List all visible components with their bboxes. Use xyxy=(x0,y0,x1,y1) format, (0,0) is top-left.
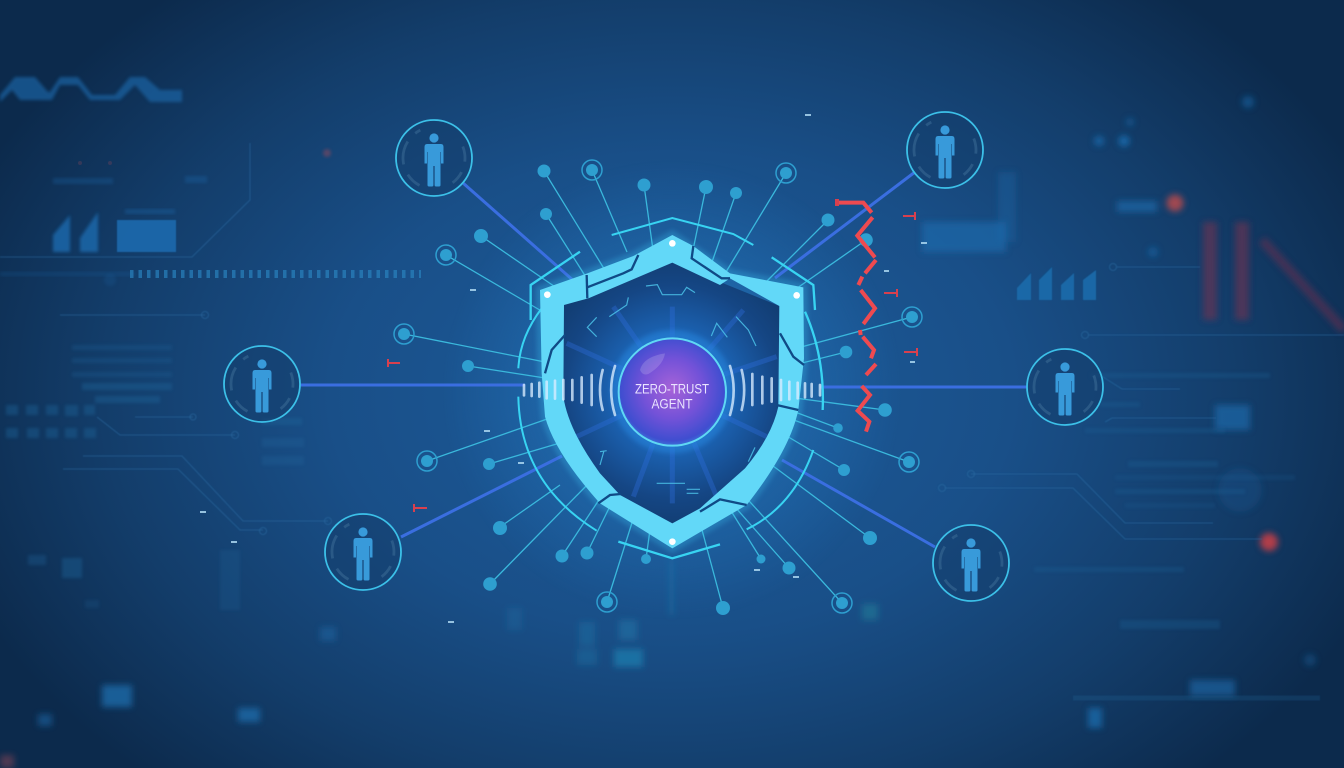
orb label: AGENT xyxy=(652,396,692,412)
background: left grid of dots xyxy=(6,345,304,610)
orb highlight xyxy=(640,353,665,374)
thick connectors from users to shield xyxy=(300,172,1027,547)
sound wave left xyxy=(524,366,615,415)
interior rays xyxy=(567,307,777,503)
user: bottom right xyxy=(933,525,1009,601)
shield cracks xyxy=(545,246,804,512)
orb label xyxy=(635,382,709,412)
spokes and nodes xyxy=(394,160,922,615)
background: left blurred data panels xyxy=(0,77,331,286)
user: top right xyxy=(907,112,983,188)
red alert markers xyxy=(388,199,917,512)
shield body xyxy=(540,235,804,548)
background: right circuit traces xyxy=(938,264,1344,698)
shield assembly xyxy=(518,218,823,558)
orb label: ZERO-TRUST xyxy=(635,382,709,396)
background: right blurred panels xyxy=(922,96,1344,728)
red breach zigzag xyxy=(838,203,876,432)
background: lower-left blurred blocks xyxy=(0,627,336,768)
user: middle left xyxy=(224,346,300,422)
shield interior xyxy=(563,263,779,523)
background: right bar icons xyxy=(1017,267,1096,300)
central orb glow xyxy=(611,330,734,453)
user: bottom left xyxy=(325,514,401,590)
outer frame arcs xyxy=(518,218,823,558)
halo around shield xyxy=(442,160,902,620)
shield glow xyxy=(540,235,804,548)
background: left dotted line xyxy=(130,270,421,278)
shield corner lights xyxy=(544,240,800,545)
sound wave right xyxy=(730,366,820,415)
user: top left xyxy=(396,120,472,196)
background: bottom centre blurred blocks xyxy=(507,560,878,667)
small white dashes xyxy=(200,115,927,622)
central orb xyxy=(619,338,726,446)
interior circuit fragments xyxy=(587,285,756,493)
user: middle right xyxy=(1027,349,1103,425)
background: right faint data rows xyxy=(1034,373,1295,629)
background: left circuit traces xyxy=(0,143,332,534)
